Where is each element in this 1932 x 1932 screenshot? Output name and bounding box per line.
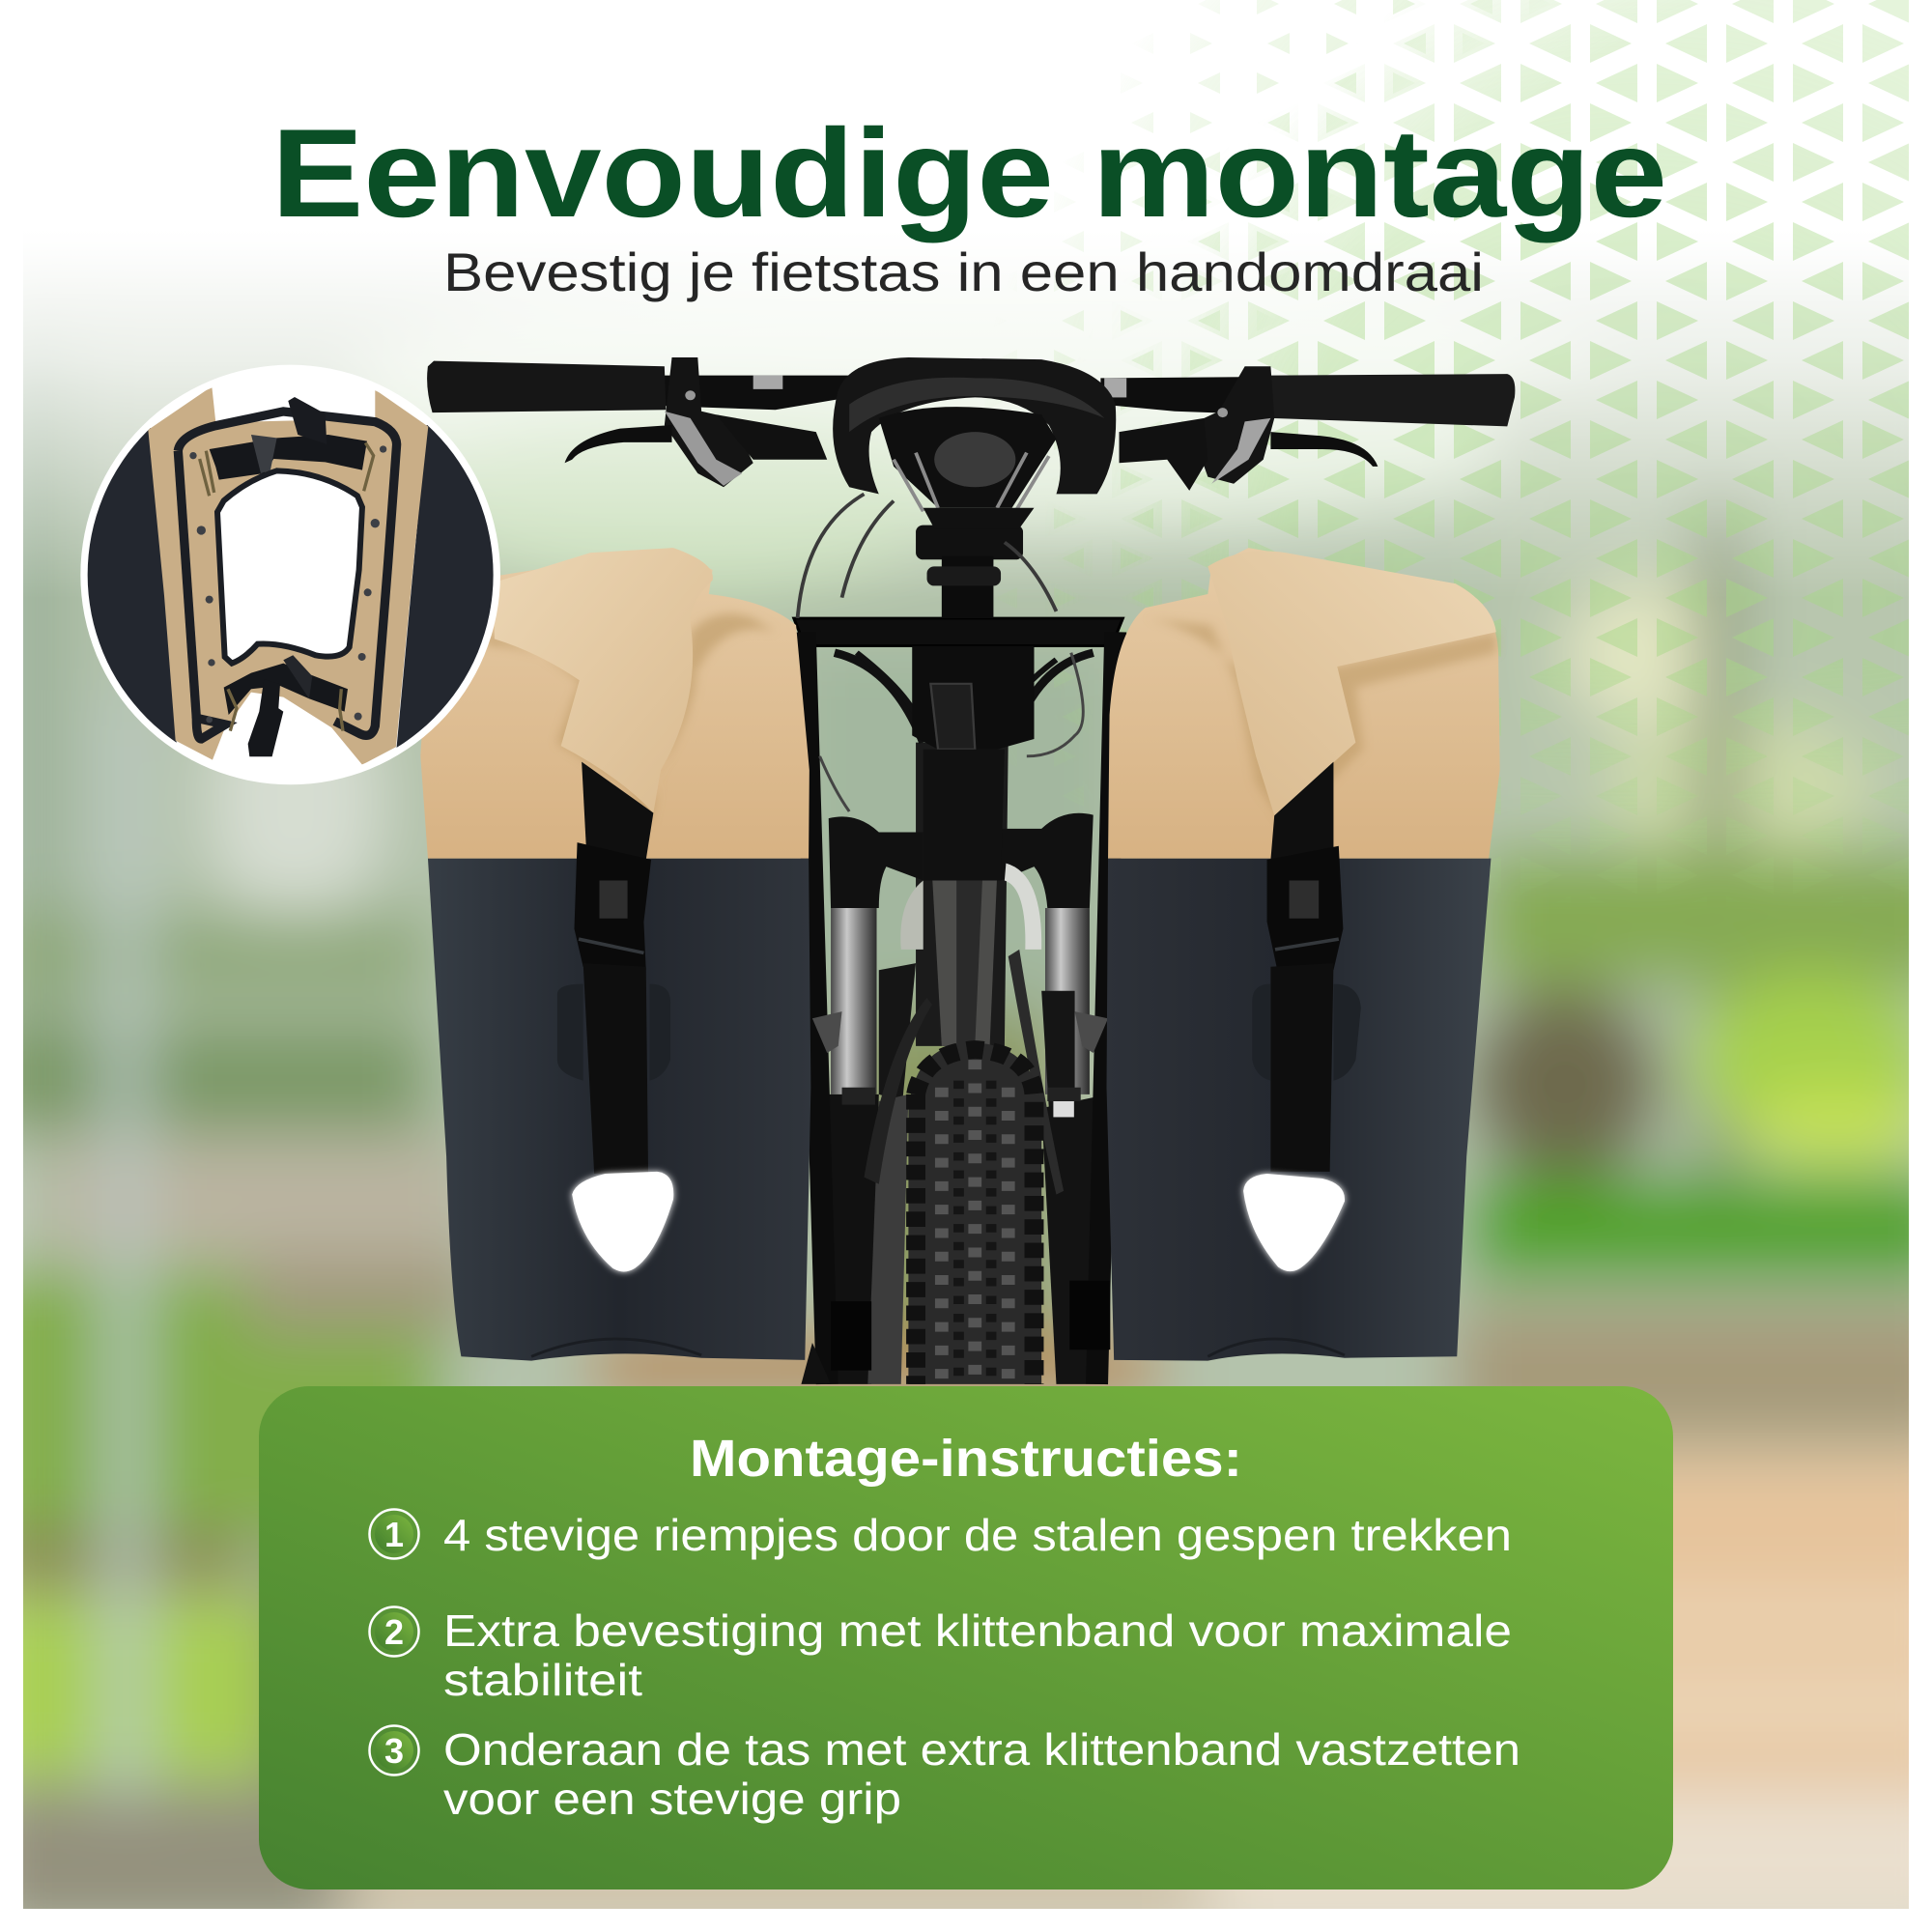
seat post xyxy=(798,494,1056,618)
right grip xyxy=(1270,374,1515,426)
saddle xyxy=(833,357,1116,494)
strap and buckle xyxy=(582,762,653,860)
shadow under flap xyxy=(1145,618,1496,825)
instructions panel xyxy=(259,1386,1673,1889)
step 2 xyxy=(369,1605,1512,1705)
top buckles xyxy=(200,442,374,496)
rear rack with lamp and stays xyxy=(794,618,1122,1384)
shadow under flap xyxy=(483,613,776,825)
step 3: voor een stevige grip xyxy=(443,1774,901,1824)
handlebar xyxy=(427,357,1515,528)
left pannier xyxy=(420,548,810,1361)
step 3 xyxy=(369,1724,1520,1824)
panel heading: Montage-instructies: xyxy=(690,1430,1242,1488)
bottom strap xyxy=(224,664,348,715)
step 3: Onderaan de tas met extra klittenband vastzetten xyxy=(443,1724,1520,1775)
flap fold xyxy=(1208,551,1496,815)
bag body dark xyxy=(1107,859,1491,1361)
bag body dark xyxy=(428,859,810,1361)
triangle pattern top right xyxy=(1054,0,1909,804)
title: Eenvoudige montage xyxy=(271,102,1667,243)
strap and buckle xyxy=(1270,762,1333,860)
tire xyxy=(908,1042,1041,1384)
reflector xyxy=(1243,1174,1345,1271)
step 2: stabiliteit xyxy=(443,1655,642,1705)
detail circle: back of pannier xyxy=(77,365,505,785)
black piping outline xyxy=(178,412,397,739)
bag roll-top beige xyxy=(420,548,810,859)
step 1: 4 stevige riempjes door de stalen gespen trekken xyxy=(443,1510,1512,1560)
step 2: Extra bevestiging met klittenband voor maximale xyxy=(443,1605,1512,1656)
step 2: 2 xyxy=(384,1612,404,1652)
subtitle: Bevestig je fietstas in een handomdraai xyxy=(443,242,1484,302)
bag roll-top beige xyxy=(1108,548,1500,859)
right clamp and lever xyxy=(1189,366,1274,484)
beige back panel xyxy=(148,386,428,765)
bottom buckles xyxy=(228,689,343,731)
lower fork legs and cables xyxy=(879,963,916,1101)
left clamp and lever xyxy=(665,357,753,487)
top strap xyxy=(210,435,367,480)
flap fold xyxy=(495,548,713,812)
reflector xyxy=(572,1172,673,1271)
product photo: bike with two panniers xyxy=(420,357,1515,1384)
window opening xyxy=(217,470,362,664)
left grip xyxy=(427,361,666,412)
dark side panels xyxy=(84,403,499,753)
step 3: 3 xyxy=(384,1731,404,1771)
right pannier xyxy=(1107,548,1500,1361)
white fade at top of background xyxy=(23,0,1909,599)
bike rear: fork, frame, wheel xyxy=(827,743,1108,1384)
step 1: 1 xyxy=(384,1515,404,1554)
eyelets xyxy=(189,445,386,723)
